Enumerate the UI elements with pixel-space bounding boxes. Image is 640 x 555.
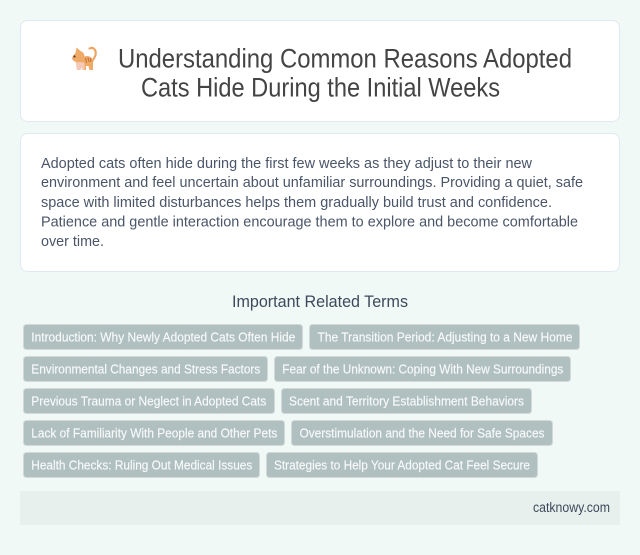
tag (266, 452, 538, 478)
icon: cat (72, 48, 96, 70)
tag: Introduction: Why Newly Adopted Cats Often Hide (31, 330, 295, 344)
heading: related terms: Important Related Terms (232, 293, 408, 311)
panel: title card (20, 20, 620, 122)
tag: Overstimulation and the Need for Safe Spaces (300, 426, 544, 440)
title (118, 44, 572, 102)
tag: Previous Trauma or Neglect in Adopted Cats (31, 394, 266, 408)
tag (24, 324, 302, 350)
tag (292, 420, 552, 446)
tag: Strategies to Help Your Adopted Cat Feel Secure (274, 458, 530, 472)
text block: description: Patience and gentle interaction encourage them to explore and become comfortable (41, 214, 578, 230)
tag (24, 388, 274, 414)
text block: description (41, 155, 583, 250)
tag (310, 324, 580, 350)
tag: Health Checks: Ruling Out Medical Issues (31, 458, 252, 472)
title: Cats Hide During the Initial Weeks (141, 72, 500, 102)
footer (20, 491, 620, 525)
panel: related term tags (24, 324, 580, 478)
tag (24, 420, 284, 446)
tag (274, 356, 570, 382)
text block: description: environment and feel uncertain about unfamiliar surroundings. Providing a quiet, safe (41, 174, 583, 191)
tag (24, 356, 268, 382)
tag (24, 452, 260, 478)
tag: Environmental Changes and Stress Factors (31, 362, 260, 376)
text block: description: space with limited disturbances helps them gradually build trust and confidence. (41, 194, 552, 211)
tag: The Transition Period: Adjusting to a New Home (318, 330, 572, 344)
text block: description: over time. (41, 233, 104, 250)
footer source text: catknowy.com (533, 500, 610, 515)
text block: description: Adopted cats often hide during the first few weeks as they adjust to their new (41, 155, 532, 172)
tag: Fear of the Unknown: Coping With New Surroundings (282, 362, 563, 376)
title: Understanding Common Reasons Adopted (118, 44, 572, 74)
panel: description (20, 134, 620, 272)
tag (282, 388, 532, 414)
tag: Scent and Territory Establishment Behaviors (289, 394, 524, 408)
tag: Lack of Familiarity With People and Other Pets (31, 426, 277, 440)
